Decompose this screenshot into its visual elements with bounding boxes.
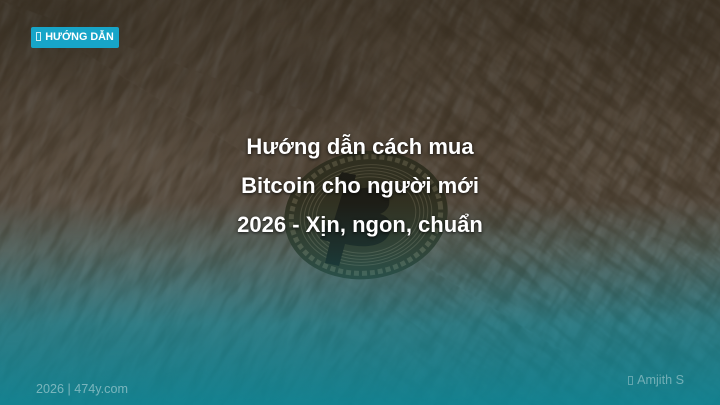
badge: category label <box>31 27 119 48</box>
title <box>236 134 484 238</box>
title: Hướng dẫn cách mua <box>246 134 474 159</box>
icon: bitcoin coin <box>284 150 448 280</box>
fur brightness patches <box>10 12 108 52</box>
source text: 2026 | 474y.com <box>36 382 128 396</box>
title: Bitcoin cho người mới <box>241 173 479 198</box>
title: 2026 - Xịn, ngon, chuẩn <box>237 212 483 237</box>
icon: bitcoin symbol on coin <box>320 172 391 266</box>
badge: category label: HƯỚNG DẪN <box>45 31 114 43</box>
author credit: Amjith S <box>637 373 684 387</box>
